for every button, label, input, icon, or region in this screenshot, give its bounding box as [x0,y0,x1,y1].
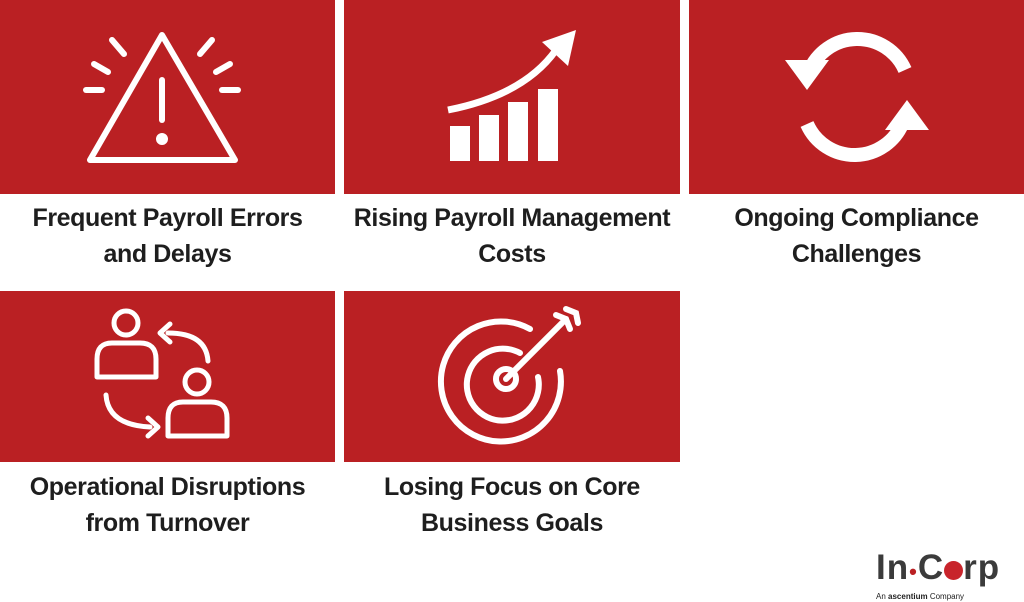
icon: target [438,306,581,444]
panel: losing focus [344,291,680,462]
panel: payroll errors [0,0,335,194]
icon: warning triangle [83,32,241,163]
panel: compliance [689,0,1024,194]
logo: In•C rp [876,548,1000,587]
logo: An ascentium Company [876,592,964,601]
text: losing focus: Losing Focus on Core [384,473,640,501]
text: turnover [30,473,305,537]
text: losing focus [384,473,640,537]
text: rising costs: Costs [478,240,546,268]
panel: turnover [0,291,335,462]
text: compliance: Ongoing Compliance [734,204,979,232]
text: payroll errors: Frequent Payroll Errors [32,204,303,232]
text: payroll errors [32,204,303,268]
text: rising costs: Rising Payroll Management [354,204,670,232]
text: losing focus: Business Goals [421,509,603,537]
text: compliance [734,204,979,268]
panel: rising costs [344,0,680,194]
icon: people swap [94,308,230,438]
icon: refresh arrows [785,32,929,162]
text: rising costs [354,204,670,268]
text: turnover: from Turnover [86,509,249,537]
text: compliance: Challenges [792,240,921,268]
text: payroll errors: and Delays [103,240,232,268]
icon: bar chart with arrow [447,30,576,161]
text: turnover: Operational Disruptions [30,473,305,501]
